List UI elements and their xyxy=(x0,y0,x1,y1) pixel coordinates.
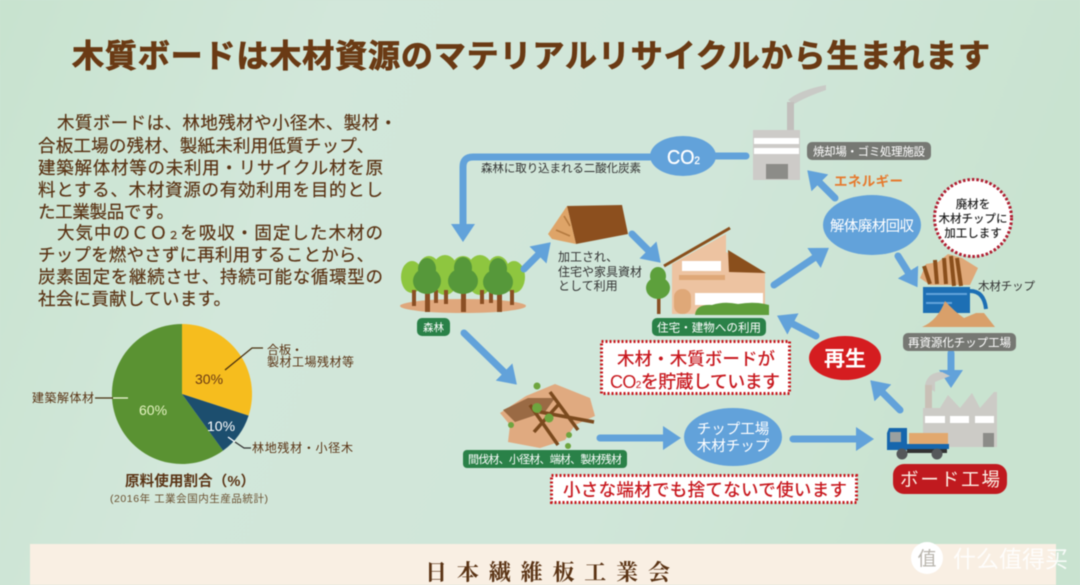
arrow: recovery to chip plant xyxy=(898,256,908,272)
chip plant label xyxy=(903,333,1016,351)
icon: thinning wood xyxy=(500,382,595,449)
energy label: エネルギー xyxy=(834,174,903,189)
callout: chip processing: 加工します xyxy=(944,226,1002,240)
watermark: 值 xyxy=(917,548,937,570)
pie labels: 合板・ xyxy=(267,343,303,357)
text: processed use: として利用 xyxy=(558,279,618,293)
pie percentages: 30% xyxy=(195,371,223,387)
arrow: chip plant to truck xyxy=(793,436,856,442)
text block: description: 炭素固定を継続させ、持続可能な循環型の xyxy=(38,267,383,287)
incinerator label xyxy=(807,142,931,160)
arrow: regeneration to house xyxy=(793,324,816,336)
icon: board factory xyxy=(923,372,997,447)
chip label: 木材チップ xyxy=(978,279,1036,293)
pie labels xyxy=(32,343,354,455)
recovery bubble xyxy=(823,195,921,255)
text: processed use: 加工され、 xyxy=(558,250,618,264)
house label: 住宅・建物への利用 xyxy=(657,320,761,334)
footer panel xyxy=(30,544,1056,585)
arrow: thinning wood to chip plant xyxy=(600,434,663,442)
pie percentages: 10% xyxy=(207,418,235,434)
arrow: forest to thinning wood xyxy=(464,333,504,372)
callout: chip processing: 廃材を xyxy=(956,197,990,211)
callout: chip processing: 木材チップに xyxy=(938,212,1008,226)
pie caption: 原料使用割合（%） xyxy=(125,472,255,490)
callout: small offcuts: 小さな端材でも捨てないで使います xyxy=(563,480,847,500)
board factory label xyxy=(893,464,1007,494)
arrow: recovery to incinerator xyxy=(820,183,835,198)
CO2 bubble xyxy=(650,136,716,176)
pie leader lines xyxy=(95,348,263,448)
text block: description: 料とする、木材資源の有効利用を目的とし xyxy=(38,180,383,200)
text block: description: 社会に貢献しています。 xyxy=(38,289,231,309)
footer organization name: 日本繊維板工業会 xyxy=(425,560,670,585)
arrow: forest to logs xyxy=(524,255,538,269)
chip plant bubble: チップ工場 xyxy=(697,421,769,438)
CO2 caption: 森林に取り込まれる二酸化炭素 xyxy=(481,161,641,175)
pie percentages: 60% xyxy=(139,402,167,418)
text: processed use: 住宅や家具資材 xyxy=(558,265,642,279)
callout: CO2 storage: CO2を貯蔵しています xyxy=(610,372,780,392)
text block: description: 建築解体材等の未利用・リサイクル材を原 xyxy=(38,158,383,178)
icon: small tree xyxy=(646,267,670,314)
text block: description: 木質ボードは、林地残材や小径木、製材・ xyxy=(57,113,397,133)
icon: house xyxy=(664,228,769,315)
text block: description: チップを燃やさずに再利用することから、 xyxy=(38,245,374,265)
pie chart: raw material share xyxy=(32,324,354,505)
callout: CO2 storage: 木材・木質ボードが xyxy=(617,349,776,369)
forest label: 森林 xyxy=(423,321,444,334)
icon: forest xyxy=(400,255,526,313)
chip plant bubble xyxy=(684,408,782,466)
pie labels: 林地残材・小径木 xyxy=(252,441,353,455)
pie slice: plywood and mill residue 30% xyxy=(182,324,252,416)
icon: truck xyxy=(887,428,949,460)
watermark: 什么值得买 xyxy=(953,546,1068,572)
callout: CO2 storage xyxy=(602,342,790,394)
chip plant label: 再資源化チップ工場 xyxy=(908,336,1012,350)
house label xyxy=(652,318,766,336)
arrow: truck to regeneration xyxy=(883,393,900,410)
pie source: (2016年 工業会国内生産品統計) xyxy=(110,492,268,505)
arrow: chip plant to board factory xyxy=(948,353,954,370)
icon: log pile xyxy=(548,205,628,244)
recovery bubble: 解体廃材回収 xyxy=(830,218,914,235)
thinning wood label: 間伐材、小径材、端材、製材残材 xyxy=(468,452,622,466)
watermark xyxy=(911,542,1068,574)
text block: description: 合板工場の残材、製紙未利用低質チップ、 xyxy=(38,136,374,156)
CO2 bubble: CO2 xyxy=(667,147,700,169)
text: processed use xyxy=(558,250,642,293)
thinning wood label xyxy=(463,450,627,468)
arrow: logs to house xyxy=(632,234,648,250)
board factory label: ボード工場 xyxy=(900,469,1000,490)
regeneration badge: 再生 xyxy=(824,348,866,371)
chip plant bubble: 木材チップ xyxy=(697,438,770,455)
text block: description: 大気中のＣＯ２を吸収・固定した木材の xyxy=(57,223,383,243)
icon: incinerator xyxy=(753,85,826,180)
callout: small offcuts xyxy=(552,476,856,502)
regeneration badge xyxy=(809,336,881,380)
pie slice: forest residue 10% xyxy=(182,394,249,451)
incinerator label: 焼却場・ゴミ処理施設 xyxy=(813,144,926,158)
arrow: incinerator to CO2 xyxy=(712,152,746,160)
text block: description: た工業製品です。 xyxy=(38,202,174,222)
arrow: house to recovery xyxy=(774,258,814,285)
pie slice: construction waste 60% xyxy=(112,324,223,464)
icon: chipper xyxy=(920,254,995,327)
title: 木質ボードは木材資源のマテリアルリサイクルから生まれます xyxy=(72,38,990,74)
callout: chip processing xyxy=(934,180,1012,256)
pie percentages xyxy=(139,371,235,434)
pie labels: 製材工場残材等 xyxy=(267,355,354,369)
text block: description xyxy=(38,113,397,309)
arrow: CO2 line to forest xyxy=(463,157,650,224)
forest label xyxy=(417,318,450,336)
pie labels: 建築解体材 xyxy=(32,390,94,405)
